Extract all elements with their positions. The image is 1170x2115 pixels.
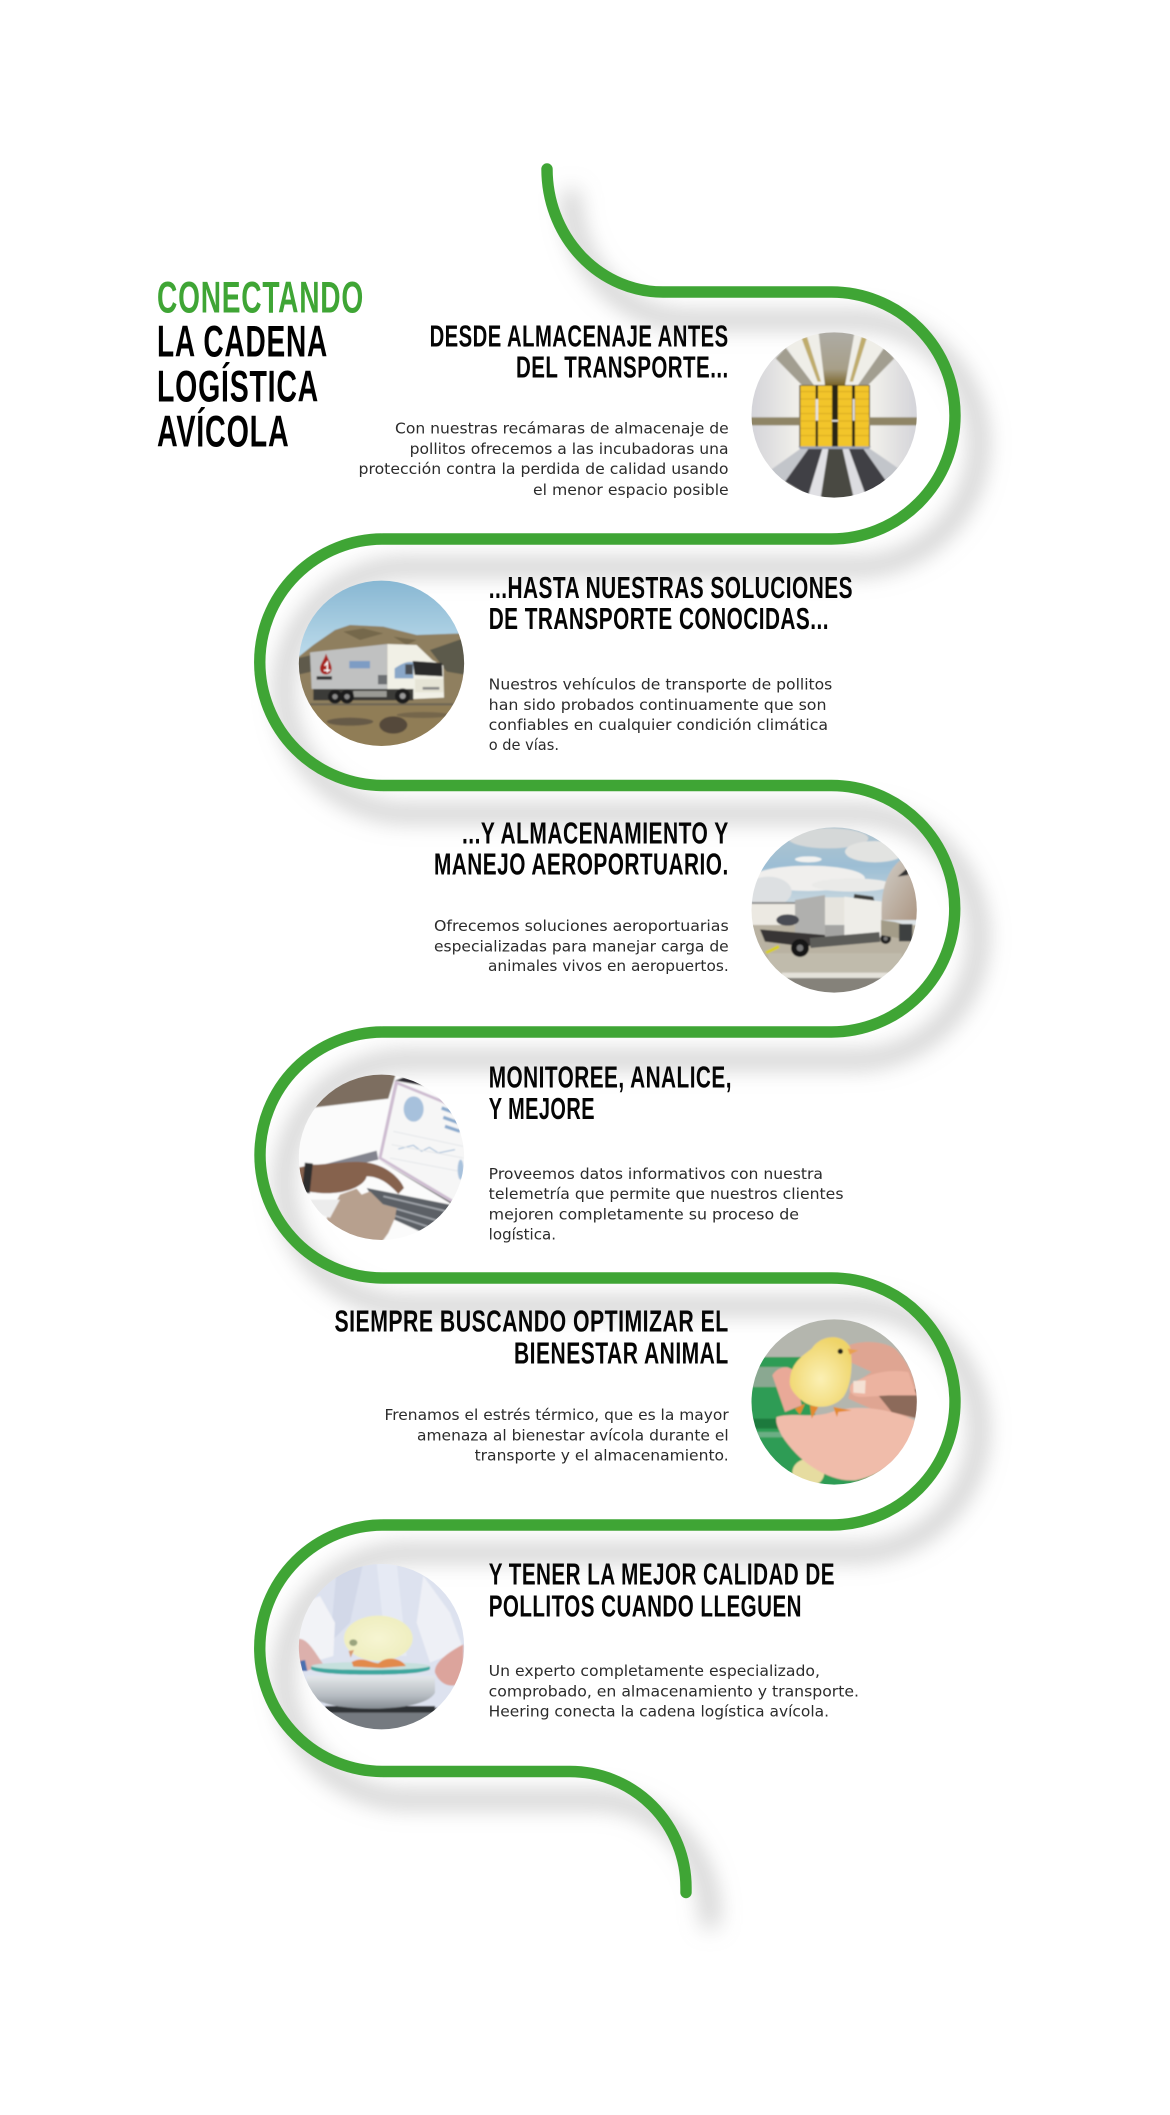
text: bienestar: amenaza al bienestar avícola durante el xyxy=(417,1428,729,1444)
text: almacenaje: protección contra la perdida de calidad usando xyxy=(358,461,729,478)
text: almacenaje: pollitos ofrecemos a las incubadoras una xyxy=(410,441,729,458)
serpentine path shadow xyxy=(284,197,979,1920)
text: transporte xyxy=(489,676,832,754)
heading: transporte xyxy=(489,570,853,636)
text: telemetría xyxy=(489,1166,844,1244)
heading: calidad xyxy=(489,1557,835,1623)
text: aeropuerto: animales vivos en aeropuertos. xyxy=(488,958,729,975)
panel: aeropuerto xyxy=(434,815,922,998)
text: bienestar: Frenamos el estrés térmico, que es la mayor xyxy=(384,1407,730,1424)
heading: almacenaje: DESDE ALMACENAJE ANTES xyxy=(430,318,729,353)
heading: almacenaje xyxy=(430,318,729,384)
text: telemetría: telemetría que permite que nuestros clientes xyxy=(489,1186,844,1203)
text: calidad: Heering conecta la cadena logística avícola. xyxy=(489,1704,829,1720)
title xyxy=(157,273,364,456)
text: telemetría: Proveemos datos informativos con nuestra xyxy=(489,1166,823,1183)
heading: calidad: POLLITOS CUANDO LLEGUEN xyxy=(489,1588,802,1623)
text: bienestar: transporte y el almacenamiento. xyxy=(475,1448,729,1464)
heading: almacenaje: DEL TRANSPORTE... xyxy=(516,349,729,384)
heading: telemetría xyxy=(489,1059,732,1126)
text: transporte: confiables en cualquier condición climática xyxy=(489,717,828,734)
text: aeropuerto: especializadas para manejar carga de xyxy=(434,938,729,956)
text: calidad: Un experto completamente especializado, xyxy=(489,1663,820,1680)
heading: aeropuerto xyxy=(434,815,729,882)
text: almacenaje: el menor espacio posible xyxy=(533,482,729,499)
heading: transporte: DE TRANSPORTE CONOCIDAS... xyxy=(489,601,829,636)
photo: chick in hands xyxy=(748,1315,922,1489)
text: almacenaje: Con nuestras recámaras de almacenaje de xyxy=(395,420,729,438)
text: aeropuerto: Ofrecemos soluciones aeroportuarias xyxy=(434,918,729,935)
panel: telemetría xyxy=(297,1059,844,1245)
text: transporte: Nuestros vehículos de transporte de pollitos xyxy=(489,676,832,694)
text: calidad xyxy=(489,1663,859,1720)
text: aeropuerto xyxy=(434,918,729,975)
panel: calidad de pollitos xyxy=(297,1557,859,1733)
photo: storage chamber xyxy=(748,328,921,502)
text: calidad: comprobado, en almacenamiento y transporte. xyxy=(489,1684,859,1700)
panel: bienestar animal xyxy=(334,1304,922,1489)
title: LOGÍSTICA xyxy=(157,362,319,412)
text: almacenaje xyxy=(358,420,729,499)
heading: aeropuerto: MANEJO AEROPORTUARIO. xyxy=(434,847,729,882)
heading: telemetría: Y MEJORE xyxy=(489,1091,595,1126)
text: bienestar xyxy=(384,1407,730,1464)
heading: telemetría: MONITOREE, ANALICE, xyxy=(489,1059,732,1094)
photo: laptop and hands xyxy=(297,1071,467,1245)
heading: calidad: Y TENER LA MEJOR CALIDAD DE xyxy=(489,1557,835,1592)
photo: truck xyxy=(297,578,467,748)
title: LA CADENA xyxy=(157,318,328,367)
heading: bienestar xyxy=(334,1304,729,1370)
panel: transporte xyxy=(297,570,853,754)
panel: almacenaje xyxy=(358,318,921,502)
heading: bienestar: BIENESTAR ANIMAL xyxy=(514,1335,729,1370)
title: CONECTANDO xyxy=(157,273,364,322)
photo: chick on scale xyxy=(297,1559,467,1733)
text: telemetría: logística. xyxy=(489,1226,556,1244)
heading: aeropuerto: ...Y ALMACENAMIENTO Y xyxy=(462,815,729,850)
heading: transporte: ...HASTA NUESTRAS SOLUCIONES xyxy=(489,570,853,605)
serpentine green path xyxy=(260,169,955,1892)
photo: airport vehicle xyxy=(752,827,917,993)
text: telemetría: mejoren completamente su proceso de xyxy=(489,1206,799,1224)
title: AVÍCOLA xyxy=(157,406,290,456)
text: transporte: o de vías. xyxy=(489,737,559,754)
text: transporte: han sido probados continuamente que son xyxy=(489,697,826,714)
heading: bienestar: SIEMPRE BUSCANDO OPTIMIZAR EL xyxy=(334,1304,729,1339)
